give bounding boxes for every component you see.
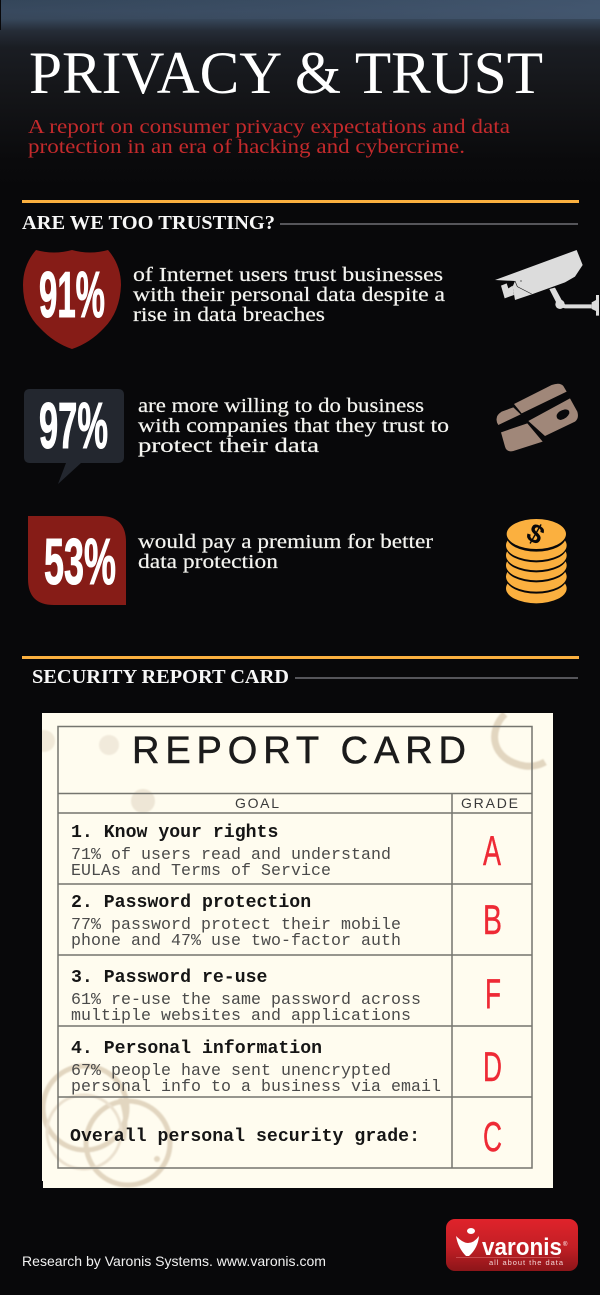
panel: report card — [33, 713, 553, 1188]
stat text: 97 percent — [138, 395, 449, 457]
row 5: overall grade — [70, 1113, 502, 1160]
row 4: personal information: personal info to a business via email — [71, 1077, 441, 1096]
stat text: 91 percent: with their personal data despite a — [133, 284, 445, 306]
row 1: know your rights: A — [483, 827, 501, 874]
row 3: password re-use: multiple websites and applications — [71, 1006, 411, 1025]
row 1: know your rights: EULAs and Terms of Service — [71, 861, 331, 880]
row 4: personal information — [71, 1039, 502, 1096]
stat: 91 percent shield: 91% — [39, 258, 105, 331]
logo: varonis: ® — [563, 1241, 568, 1248]
row 1: know your rights — [71, 823, 501, 880]
stat text: 53 percent — [138, 531, 433, 573]
coffee stains — [33, 714, 545, 1185]
icon: coin stack: $ — [521, 517, 550, 551]
stat text: 91 percent — [133, 264, 445, 326]
stat text: 53 percent: data protection — [138, 551, 278, 573]
row 2: password protection — [71, 893, 502, 950]
column headers — [235, 795, 518, 811]
report card title: REPORT CARD — [132, 730, 466, 772]
stat text: 97 percent: with companies that they trust to — [138, 415, 449, 437]
stat text: 53 percent: would pay a premium for better — [138, 531, 433, 553]
row 3: password re-use: 3. Password re-use — [71, 968, 268, 988]
stat: 53 percent leaf badge: 53% — [44, 525, 116, 598]
logo: varonis — [446, 1219, 578, 1271]
row 2: password protection: phone and 47% use two-factor auth — [71, 931, 401, 950]
logo: varonis: varonis — [482, 1234, 562, 1261]
title: PRIVACY & TRUST — [29, 40, 543, 106]
stat text: 91 percent: rise in data breaches — [133, 304, 325, 326]
stat: 91 percent shield — [23, 250, 121, 349]
row 2: password protection: 2. Password protection — [71, 893, 311, 913]
icon: coin stack — [506, 517, 567, 603]
report card grid — [58, 726, 532, 1168]
section heading: security report card: SECURITY REPORT CARD — [32, 666, 289, 688]
header photo backdrop — [0, 0, 600, 190]
row 4: personal information: D — [483, 1043, 502, 1090]
row 5: overall grade: C — [483, 1113, 502, 1160]
section heading: are we too trusting — [22, 200, 579, 234]
row 3: password re-use: 61% re-use the same password across — [71, 990, 421, 1009]
section heading: are we too trusting: ARE WE TOO TRUSTING? — [22, 212, 275, 234]
row 1: know your rights: 71% of users read and understand — [71, 845, 391, 864]
icon: wallet — [497, 384, 578, 451]
subtitle: protection in an era of hacking and cybercrime. — [28, 136, 465, 158]
subtitle: A report on consumer privacy expectations and data — [28, 116, 510, 138]
row 2: password protection: B — [483, 896, 502, 943]
stat text: 91 percent: of Internet users trust businesses — [133, 264, 443, 286]
footer credit: Research by Varonis Systems. www.varonis.com — [22, 1253, 326, 1269]
row 5: overall grade: Overall personal security grade: — [70, 1127, 420, 1147]
row 4: personal information: 67% people have sent unencrypted — [71, 1061, 391, 1080]
logo: varonis: all about the data — [489, 1258, 564, 1267]
column headers: GOAL — [235, 795, 279, 811]
stat text: 97 percent: are more willing to do business — [138, 395, 424, 417]
stat: 97 percent speech bubble: 97% — [39, 389, 108, 462]
stat: 53 percent leaf badge — [28, 516, 126, 605]
row 4: personal information: 4. Personal information — [71, 1039, 322, 1059]
stat text: 97 percent: protect their data — [138, 435, 319, 457]
row 3: password re-use — [71, 968, 501, 1025]
row 2: password protection: 77% password protect their mobile — [71, 915, 401, 934]
column headers: GRADE — [461, 795, 518, 811]
row 1: know your rights: 1. Know your rights — [71, 823, 278, 843]
icon: security camera — [495, 250, 599, 316]
row 3: password re-use: F — [485, 970, 501, 1017]
stat: 97 percent speech bubble — [24, 389, 124, 484]
subtitle — [28, 116, 510, 158]
section heading: security report card — [22, 656, 579, 688]
